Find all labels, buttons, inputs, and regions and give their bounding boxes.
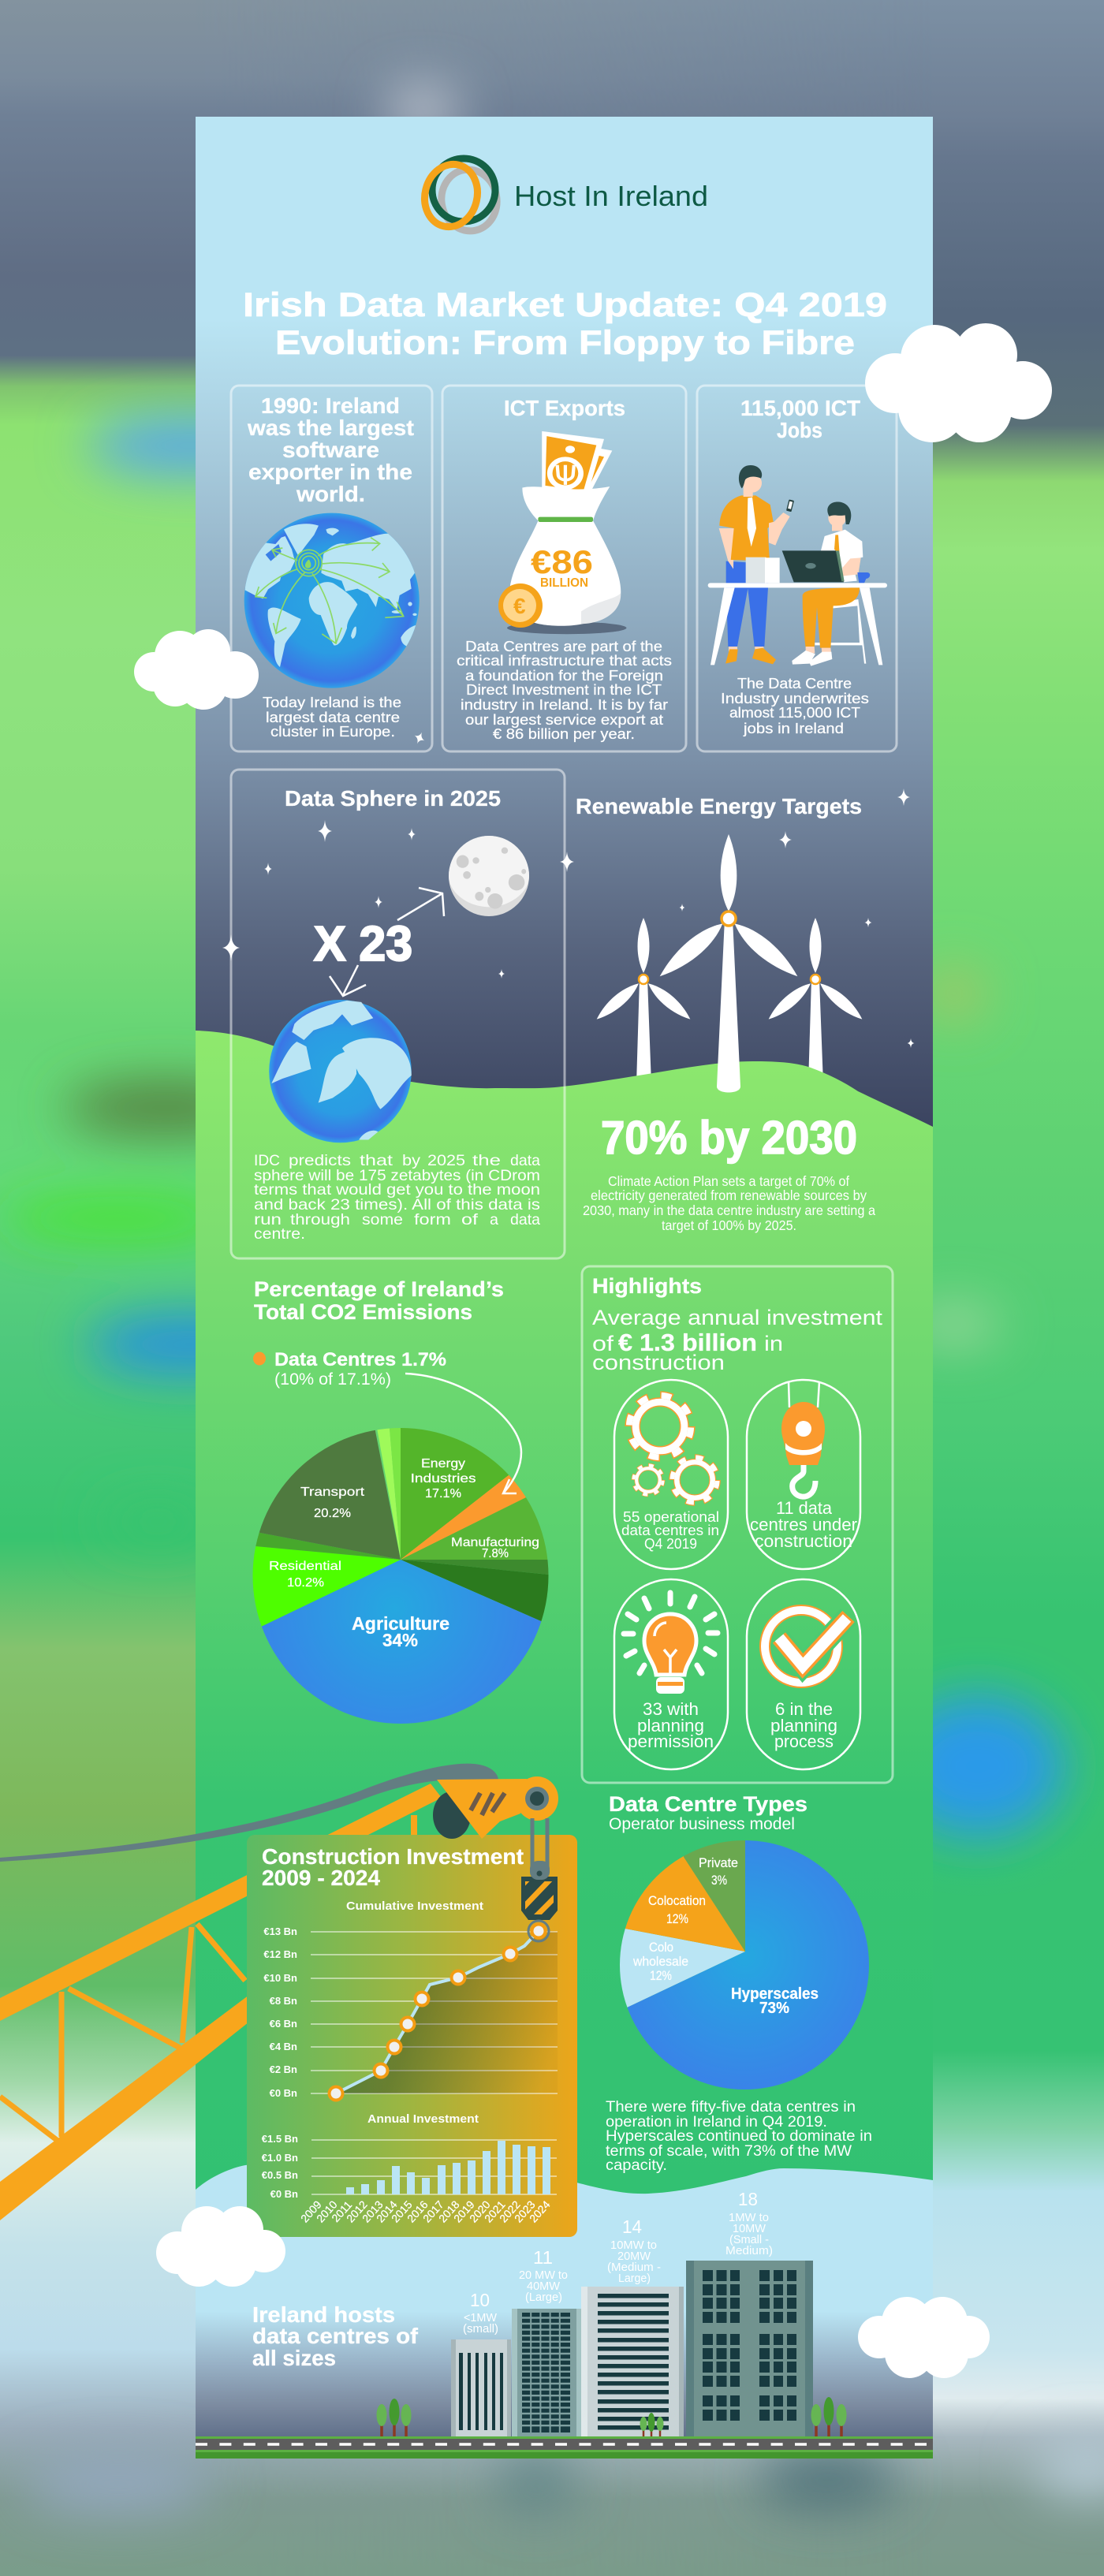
arrow: data centres to pie slice <box>405 1374 521 1493</box>
icon: earth <box>269 1000 412 1143</box>
crane pulley head <box>433 1776 558 1873</box>
text: 11 data centres: centres under <box>750 1515 857 1534</box>
text: data centres critical infrastructure: industry in Ireland. It is by far <box>461 696 668 713</box>
text: 11 data centres: 11 data <box>776 1498 833 1518</box>
panel background <box>196 117 933 2440</box>
text: today Ireland <box>263 694 401 740</box>
heading: 1990: world. <box>296 482 365 506</box>
heading: 1990: was the largest <box>247 416 414 440</box>
text: 55 operational: data centres in <box>621 1523 719 1538</box>
building: 14 medium-large: 20MW <box>617 2250 651 2263</box>
chart: annual investment: 2020 <box>467 2198 493 2225</box>
text: 11 data centres: construction <box>755 1531 852 1551</box>
text: 11 data centres <box>750 1498 857 1551</box>
text: IDC predicts: of <box>461 1211 479 1228</box>
building: 14 medium-large <box>581 2216 684 2436</box>
stars <box>222 729 915 1048</box>
icon: money bag: € <box>513 594 526 618</box>
pie chart: operator types <box>620 1840 869 2090</box>
text: IDC predicts: terms that would get you to the moon <box>254 1181 540 1199</box>
text: 6 in the planning: process <box>774 1732 834 1751</box>
chart: cumulative investment: €2 Bn <box>270 2063 297 2075</box>
chart: cumulative investment: €12 Bn <box>263 1948 297 1960</box>
text: 55 operational: 55 operational <box>623 1509 719 1525</box>
heading: 1990: software <box>282 438 379 462</box>
pie chart: operator types: wholesale <box>632 1954 688 1969</box>
chart: annual investment: 2011 <box>329 2198 354 2224</box>
pie label: energy <box>411 1457 476 1500</box>
heading: ICT Exports: ICT Exports <box>504 396 625 420</box>
text: average annual investment: in <box>764 1332 783 1355</box>
panel: ICT exports <box>442 386 686 751</box>
text: 33 with planning <box>628 1699 714 1751</box>
text: IDC predicts: by <box>402 1152 420 1169</box>
text: average annual investment: construction <box>592 1351 725 1374</box>
pie label: manufacturing <box>451 1536 539 1560</box>
chart: cumulative investment: €4 Bn <box>270 2041 297 2052</box>
pie chart: emissions <box>252 1428 549 1724</box>
building: 10 small <box>451 2290 511 2436</box>
heading: percentage of CO2: Total CO2 Emissions <box>254 1300 472 1324</box>
pie label: energy: 17.1% <box>425 1487 461 1500</box>
text: climate action plan: Climate Action Plan sets a target of 70% of <box>608 1173 849 1189</box>
legend: data centres: (10% of 17.1%) <box>274 1370 391 1389</box>
heading: highlights: Highlights <box>592 1274 702 1298</box>
heading: ireland hosts data centres <box>252 2302 419 2370</box>
heading: construction investment <box>262 1844 524 1890</box>
building: 18 small-medium: 18 <box>738 2189 758 2209</box>
title: Irish Data Market Update: Q4 2019 <box>243 286 887 324</box>
heading: construction investment: Construction Investment <box>262 1844 524 1869</box>
text: climate action plan <box>583 1173 875 1233</box>
building: 14 medium-large: 10MW to <box>610 2239 657 2252</box>
text: IDC predicts <box>254 1152 540 1243</box>
pie label: agriculture: 34% <box>382 1630 418 1650</box>
heading: 1990 <box>247 393 414 506</box>
text: IDC predicts: some <box>362 1211 403 1228</box>
pie label: energy: Energy <box>421 1457 465 1471</box>
text: today Ireland: Today Ireland is the <box>263 694 401 710</box>
pie chart: operator types: Colocation <box>648 1893 706 1908</box>
chart: cumulative investment: €8 Bn <box>270 1995 297 2007</box>
chart: annual investment: 2015 <box>389 2198 415 2225</box>
text: 33 with planning: 33 with <box>643 1699 699 1719</box>
heading: 1990: 1990: Ireland <box>261 393 400 418</box>
panel: data sphere in 2025 <box>231 770 565 1258</box>
logo: Host In Ireland <box>418 158 708 235</box>
building: 10 small: 10 <box>470 2290 490 2310</box>
text: today Ireland: cluster in Europe. <box>270 723 395 740</box>
pie label: manufacturing: 7.8% <box>482 1547 509 1560</box>
text: average annual investment: of <box>592 1332 614 1355</box>
pie chart: operator types: Private <box>699 1855 738 1870</box>
chart: annual investment: 2023 <box>512 2198 538 2225</box>
chart: annual investment: 2021 <box>482 2198 508 2225</box>
building: 18 small-medium: (Small - <box>729 2233 769 2246</box>
text: average annual investment: € 1.3 billion <box>618 1329 757 1356</box>
text: fifty-five data centres: operation in Ireland in Q4 2019. <box>606 2114 827 2131</box>
heading: 115,000 ICT Jobs: 115,000 ICT <box>740 396 860 420</box>
heading: construction investment: 2009 - 2024 <box>262 1866 380 1890</box>
chart: annual investment: €0.5 Bn <box>262 2169 298 2181</box>
text: IDC predicts: a <box>490 1211 498 1228</box>
heading: renewable energy targets: Renewable Energy Targets <box>576 794 862 818</box>
text: data centres critical infrastructure: Direct Investment in the ICT <box>466 681 662 698</box>
text: average annual investment <box>592 1306 883 1374</box>
text: IDC predicts: through <box>290 1211 350 1228</box>
crane cable <box>0 1764 498 1862</box>
text: data centre industry underwrites: jobs in Ireland <box>743 720 844 736</box>
chart: annual investment: 2012 <box>344 2198 370 2225</box>
pie chart: operator types: Hyperscales <box>731 1985 819 2003</box>
text: IDC predicts: IDC <box>254 1152 280 1169</box>
text: 6 in the planning: planning <box>770 1716 837 1735</box>
chart: annual investment: 2010 <box>314 2198 340 2225</box>
text: IDC predicts: data <box>510 1211 540 1228</box>
pie label: residential: Residential <box>269 1560 341 1573</box>
pill: planning process <box>747 1579 860 1769</box>
panel: highlights <box>582 1266 893 1783</box>
heading: data centre types: Operator business model <box>609 1815 795 1833</box>
icon: two workers at a desk <box>708 465 887 666</box>
chart: annual investment: €0 Bn <box>270 2188 298 2200</box>
icon: money bag <box>498 431 626 634</box>
chart: annual investment: Annual Investment <box>367 2112 479 2126</box>
heading: 1990: exporter in the <box>248 460 412 484</box>
heading: data centre types <box>609 1792 807 1833</box>
trees left <box>377 2399 412 2436</box>
pill: under construction <box>747 1380 860 1569</box>
icon: check mark <box>765 1610 849 1683</box>
chart: annual investment: 2017 <box>420 2198 446 2225</box>
arrow: to the moon <box>397 888 444 920</box>
pie label: transport: 20.2% <box>314 1507 351 1520</box>
cloud: lower right <box>858 2297 990 2378</box>
text: IDC predicts: that <box>360 1152 393 1169</box>
pie chart: operator types: Colo <box>649 1940 673 1955</box>
legend: data centres: Data Centres 1.7% <box>274 1349 446 1370</box>
icon: small wind turbine right <box>765 918 866 1084</box>
building: 11 large: 20 MW to <box>519 2268 568 2282</box>
building: 11 large <box>512 2247 581 2436</box>
trees centre <box>640 2413 664 2438</box>
text: 33 with planning: planning <box>637 1716 704 1735</box>
text: 6 in the planning: 6 in the <box>775 1699 833 1719</box>
chart: cumulative investment <box>263 1899 558 2102</box>
text: data centre industry underwrites: Industry underwrites <box>721 690 869 706</box>
pie label: residential <box>269 1560 341 1590</box>
pie label: agriculture <box>352 1613 449 1650</box>
icon: globe with export arrows <box>244 513 420 688</box>
pill: operational data centres <box>614 1380 728 1569</box>
building: 18 small-medium: 1MW to <box>729 2211 769 2224</box>
heading: percentage of CO2 <box>254 1277 504 1324</box>
icon: light bulb <box>624 1593 718 1694</box>
text: 33 with planning: permission <box>628 1732 714 1751</box>
heading: ireland hosts data centres: all sizes <box>252 2346 336 2370</box>
building: 10 small: <1MW <box>464 2311 498 2324</box>
cloud: upper right <box>865 323 1052 442</box>
text: data centres critical infrastructure <box>457 638 672 742</box>
text: IDC predicts: and back 23 times). All of this data is <box>254 1196 540 1213</box>
building: 11 large: 40MW <box>527 2280 561 2293</box>
cloud: middle left <box>134 629 259 710</box>
building: 14 medium-large: Large) <box>618 2272 651 2285</box>
heading: 115,000 ICT Jobs <box>740 396 860 442</box>
text: 6 in the planning <box>770 1699 837 1751</box>
heading: data centre types: Data Centre Types <box>609 1792 807 1816</box>
building: 14 medium-large: (Medium - <box>607 2261 661 2274</box>
pie label: transport: Transport <box>300 1486 365 1499</box>
heading: ireland hosts data centres: Ireland hosts <box>252 2302 395 2327</box>
cloud: lower left <box>156 2206 285 2287</box>
text: IDC predicts: predicts <box>289 1152 351 1169</box>
pie label: transport <box>300 1486 365 1520</box>
chart: cumulative investment: €10 Bn <box>263 1972 297 1984</box>
road <box>196 2436 933 2459</box>
text: data centre industry underwrites: almost 115,000 ICT <box>729 704 860 721</box>
icon: small wind turbine left <box>593 918 694 1084</box>
panel: data centre types <box>606 1792 883 2174</box>
text: data centre industry underwrites: The Data Centre <box>737 675 852 692</box>
text: climate action plan: 2030, many in the data centre industry are setting a <box>583 1202 875 1218</box>
text: 55 operational <box>621 1509 719 1552</box>
text: data centres critical infrastructure: a foundation for the Foreign <box>465 667 663 684</box>
text: data centres critical infrastructure: Data Centres are part of the <box>465 638 662 654</box>
crane boom <box>0 1784 442 2220</box>
text: IDC predicts: 2025 <box>427 1152 465 1169</box>
panel: 1990 software exporter <box>231 386 432 751</box>
chart: annual investment <box>262 2112 557 2225</box>
icon: moon <box>449 836 529 916</box>
text: data centres critical infrastructure: € 86 billion per year. <box>493 725 635 742</box>
pie chart: operator types: 12% <box>650 1968 672 1983</box>
text: IDC predicts: the <box>472 1152 501 1169</box>
big number: 70% by 2030: 70% by 2030 <box>601 1112 857 1164</box>
icon: large wind turbine <box>655 834 803 1093</box>
text: data centre industry underwrites <box>721 675 869 736</box>
chart: annual investment: 2022 <box>497 2198 523 2225</box>
text: climate action plan: electricity generated from renewable sources by <box>591 1187 867 1203</box>
text: 55 operational: Q4 2019 <box>644 1536 697 1552</box>
title <box>243 286 887 362</box>
chart: annual investment: 2019 <box>451 2198 477 2225</box>
chart: annual investment: 2014 <box>374 2198 400 2225</box>
text: data centres critical infrastructure: our largest service export at <box>465 711 663 728</box>
panel: construction investment <box>247 1835 577 2237</box>
text: IDC predicts: run <box>254 1211 282 1228</box>
text: fifty-five data centres: There were fifty-five data centres in <box>606 2099 856 2116</box>
pie label: energy: Industries <box>411 1472 476 1486</box>
trees right <box>811 2397 847 2436</box>
pie chart: operator types: 3% <box>711 1873 727 1888</box>
arrow: to the earth <box>330 965 366 996</box>
icon: gears <box>629 1396 718 1503</box>
heading: percentage of CO2: Percentage of Ireland’s <box>254 1277 504 1301</box>
panel: CO2 emissions <box>252 1281 549 1724</box>
building: 18 small-medium: Medium) <box>725 2244 773 2257</box>
crane hook block <box>521 1861 558 1943</box>
icon: money bag: BILLION <box>540 576 588 590</box>
chart: annual investment: 2013 <box>360 2198 386 2225</box>
building: 11 large: 11 <box>533 2247 553 2268</box>
text: data centres critical infrastructure: critical infrastructure that acts <box>457 652 672 669</box>
text: IDC predicts: centre. <box>254 1225 305 1243</box>
text: IDC predicts: form <box>414 1211 451 1228</box>
chart: annual investment: 2016 <box>405 2198 431 2225</box>
text: fifty-five data centres: capacity. <box>606 2157 667 2174</box>
text: climate action plan: target of 100% by 2025. <box>662 1217 796 1233</box>
pill: planning permission <box>614 1579 728 1769</box>
chart: cumulative investment: Cumulative Investment <box>346 1899 483 1913</box>
pie chart: operator types: 12% <box>666 1911 688 1926</box>
chart: annual investment: 2009 <box>298 2198 324 2225</box>
chart: cumulative investment: €6 Bn <box>270 2018 297 2030</box>
building: 11 large: (Large) <box>525 2291 562 2304</box>
chart: annual investment: 2024 <box>527 2198 553 2225</box>
title: Evolution: From Floppy to Fibre <box>275 324 855 362</box>
building: 10 small: (small) <box>463 2322 498 2336</box>
heading: data sphere: Data Sphere in 2025 <box>285 786 501 811</box>
chart: annual investment: €1.0 Bn <box>262 2152 298 2164</box>
text: fifty-five data centres: Hyperscales continued to dominate in <box>606 2128 872 2145</box>
text: IDC predicts: data <box>510 1152 540 1169</box>
text: average annual investment: Average annual investment <box>592 1306 883 1329</box>
building: 14 medium-large: 14 <box>622 2216 642 2237</box>
chart: cumulative investment: €13 Bn <box>263 1925 297 1937</box>
chart: annual investment: €1.5 Bn <box>262 2133 298 2145</box>
heading: ireland hosts data centres: data centres of <box>252 2324 419 2348</box>
icon: crane hook <box>781 1381 825 1497</box>
pie label: manufacturing: Manufacturing <box>451 1536 539 1549</box>
big number: x 23: X 23 <box>314 917 412 971</box>
text: IDC predicts: sphere will be 175 zetabytes (in CDrom <box>254 1167 540 1184</box>
pie chart: operator types: 73% <box>759 2000 789 2017</box>
text: fifty-five data centres <box>606 2099 872 2174</box>
chart: annual investment: 2018 <box>436 2198 462 2225</box>
chart: cumulative investment: €0 Bn <box>270 2087 297 2099</box>
heading: 115,000 ICT Jobs: Jobs <box>777 418 822 442</box>
text: today Ireland: largest data centre <box>266 709 400 725</box>
text: fifty-five data centres: terms of scale, with 73% of the MW <box>606 2143 852 2160</box>
pie label: residential: 10.2% <box>287 1576 324 1590</box>
building: 18 small-medium: 10MW <box>733 2222 766 2235</box>
legend: data centres <box>253 1349 446 1389</box>
pie label: agriculture: Agriculture <box>352 1613 449 1634</box>
panel: 115,000 ICT jobs <box>697 386 897 751</box>
building: 18 small-medium <box>686 2189 813 2436</box>
logo: Host In Ireland: Host In Ireland <box>514 180 708 212</box>
icon: money bag: €86 <box>531 543 593 580</box>
